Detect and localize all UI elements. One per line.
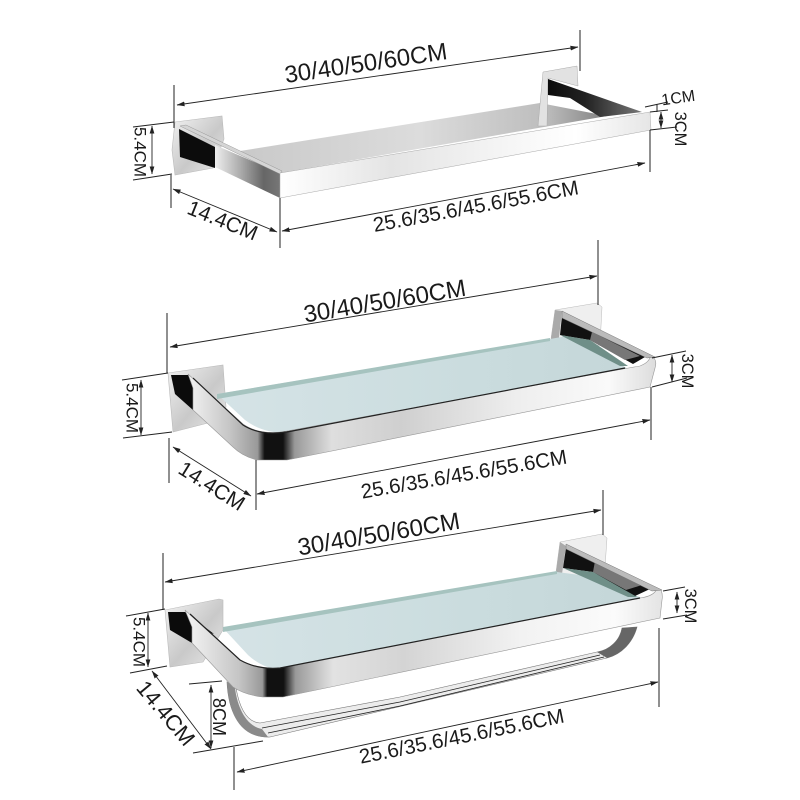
front rail [188,356,656,460]
dimension: inner length [234,628,659,790]
dimension: plate height: 5.4CM [130,127,150,177]
right arm grey reflection [593,561,642,590]
dimension: total width: 30/40/50/60CM [283,38,449,89]
front face [280,112,651,198]
shelf 1: flat metal shelf with dimensions [130,30,696,248]
right wall plate [538,66,578,126]
dimension: 3cm height: 3CM [681,589,699,623]
dimension: 1cm thickness: 1CM [660,88,696,109]
towel bar left curl [227,682,268,737]
rail inner edge [190,598,640,668]
dimension: depth: 14.4CM [131,676,200,751]
dimension: total width [174,30,580,128]
dimension: plate height: 5.4CM [130,617,148,667]
shelf 3: glass shelf with towel bar and dimensions [126,490,699,790]
shelf 2: glass shelf with dimensions [122,240,696,516]
dimension: towel bar drop: 8CM [209,698,229,736]
arm top edge [180,125,282,174]
dimension: 3cm height [663,587,699,623]
right arm dark interior [560,316,645,364]
left arm side face [215,145,280,198]
dimension: inner length [280,130,650,248]
dimension: plate height: 5.4CM [122,383,142,433]
dimension: total width: 30/40/50/60CM [296,508,462,561]
dimension: 3cm height [650,112,689,146]
left wall plate [168,365,226,432]
glass panel [217,335,628,433]
dimension: 3cm height [652,351,696,388]
dimension: total width [167,240,598,373]
right arm dark interior [548,79,642,117]
left wall plate [172,116,224,175]
dimension: towel bar drop [189,681,263,753]
towel bar [227,627,637,737]
left arm dark interior [179,129,215,168]
dimension: depth [173,189,277,245]
dimension: 3cm height: 3CM [678,354,696,388]
left arm dark interior [168,612,214,643]
front rail [185,588,662,697]
right arm grey reflection [590,332,640,360]
towel bar right curl [597,627,637,658]
glass panel [223,572,642,670]
dimension: total width [163,490,603,610]
dimension: total width: 30/40/50/60CM [302,275,468,328]
dimension: plate height [126,609,167,673]
dimension: plate height [130,122,174,208]
dimension: plate height [122,373,172,483]
right arm band [566,544,662,591]
dimension: 3cm height: 3CM [671,112,689,146]
dimension: inner length: 25.6/35.6/45.6/55.6CM [359,446,569,504]
grey shelf plate [240,103,607,173]
rail inner edge [193,368,625,433]
right wall plate [549,303,602,355]
right wall plate [554,534,607,588]
dimension: depth: 14.4CM [184,197,261,245]
dimension: depth: 14.4CM [174,457,249,516]
left wall plate [165,599,223,667]
right arm dark interior [563,548,650,597]
left arm dark interior [171,375,214,410]
right plate edge strip [554,542,566,588]
right arm glass strip [563,568,637,597]
dimension: inner length: 25.6/35.6/45.6/55.6CM [357,705,566,769]
dimension: inner length [256,387,651,510]
glass back edge [217,338,550,399]
glass back edge [223,571,557,632]
towel bar stripes [262,655,604,733]
right arm band [562,311,655,358]
dimension: inner length: 25.6/35.6/45.6/55.6CM [371,176,580,237]
right plate edge strip [549,310,562,355]
dimension: 1cm thickness [645,88,696,112]
right arm glass strip [560,335,628,366]
